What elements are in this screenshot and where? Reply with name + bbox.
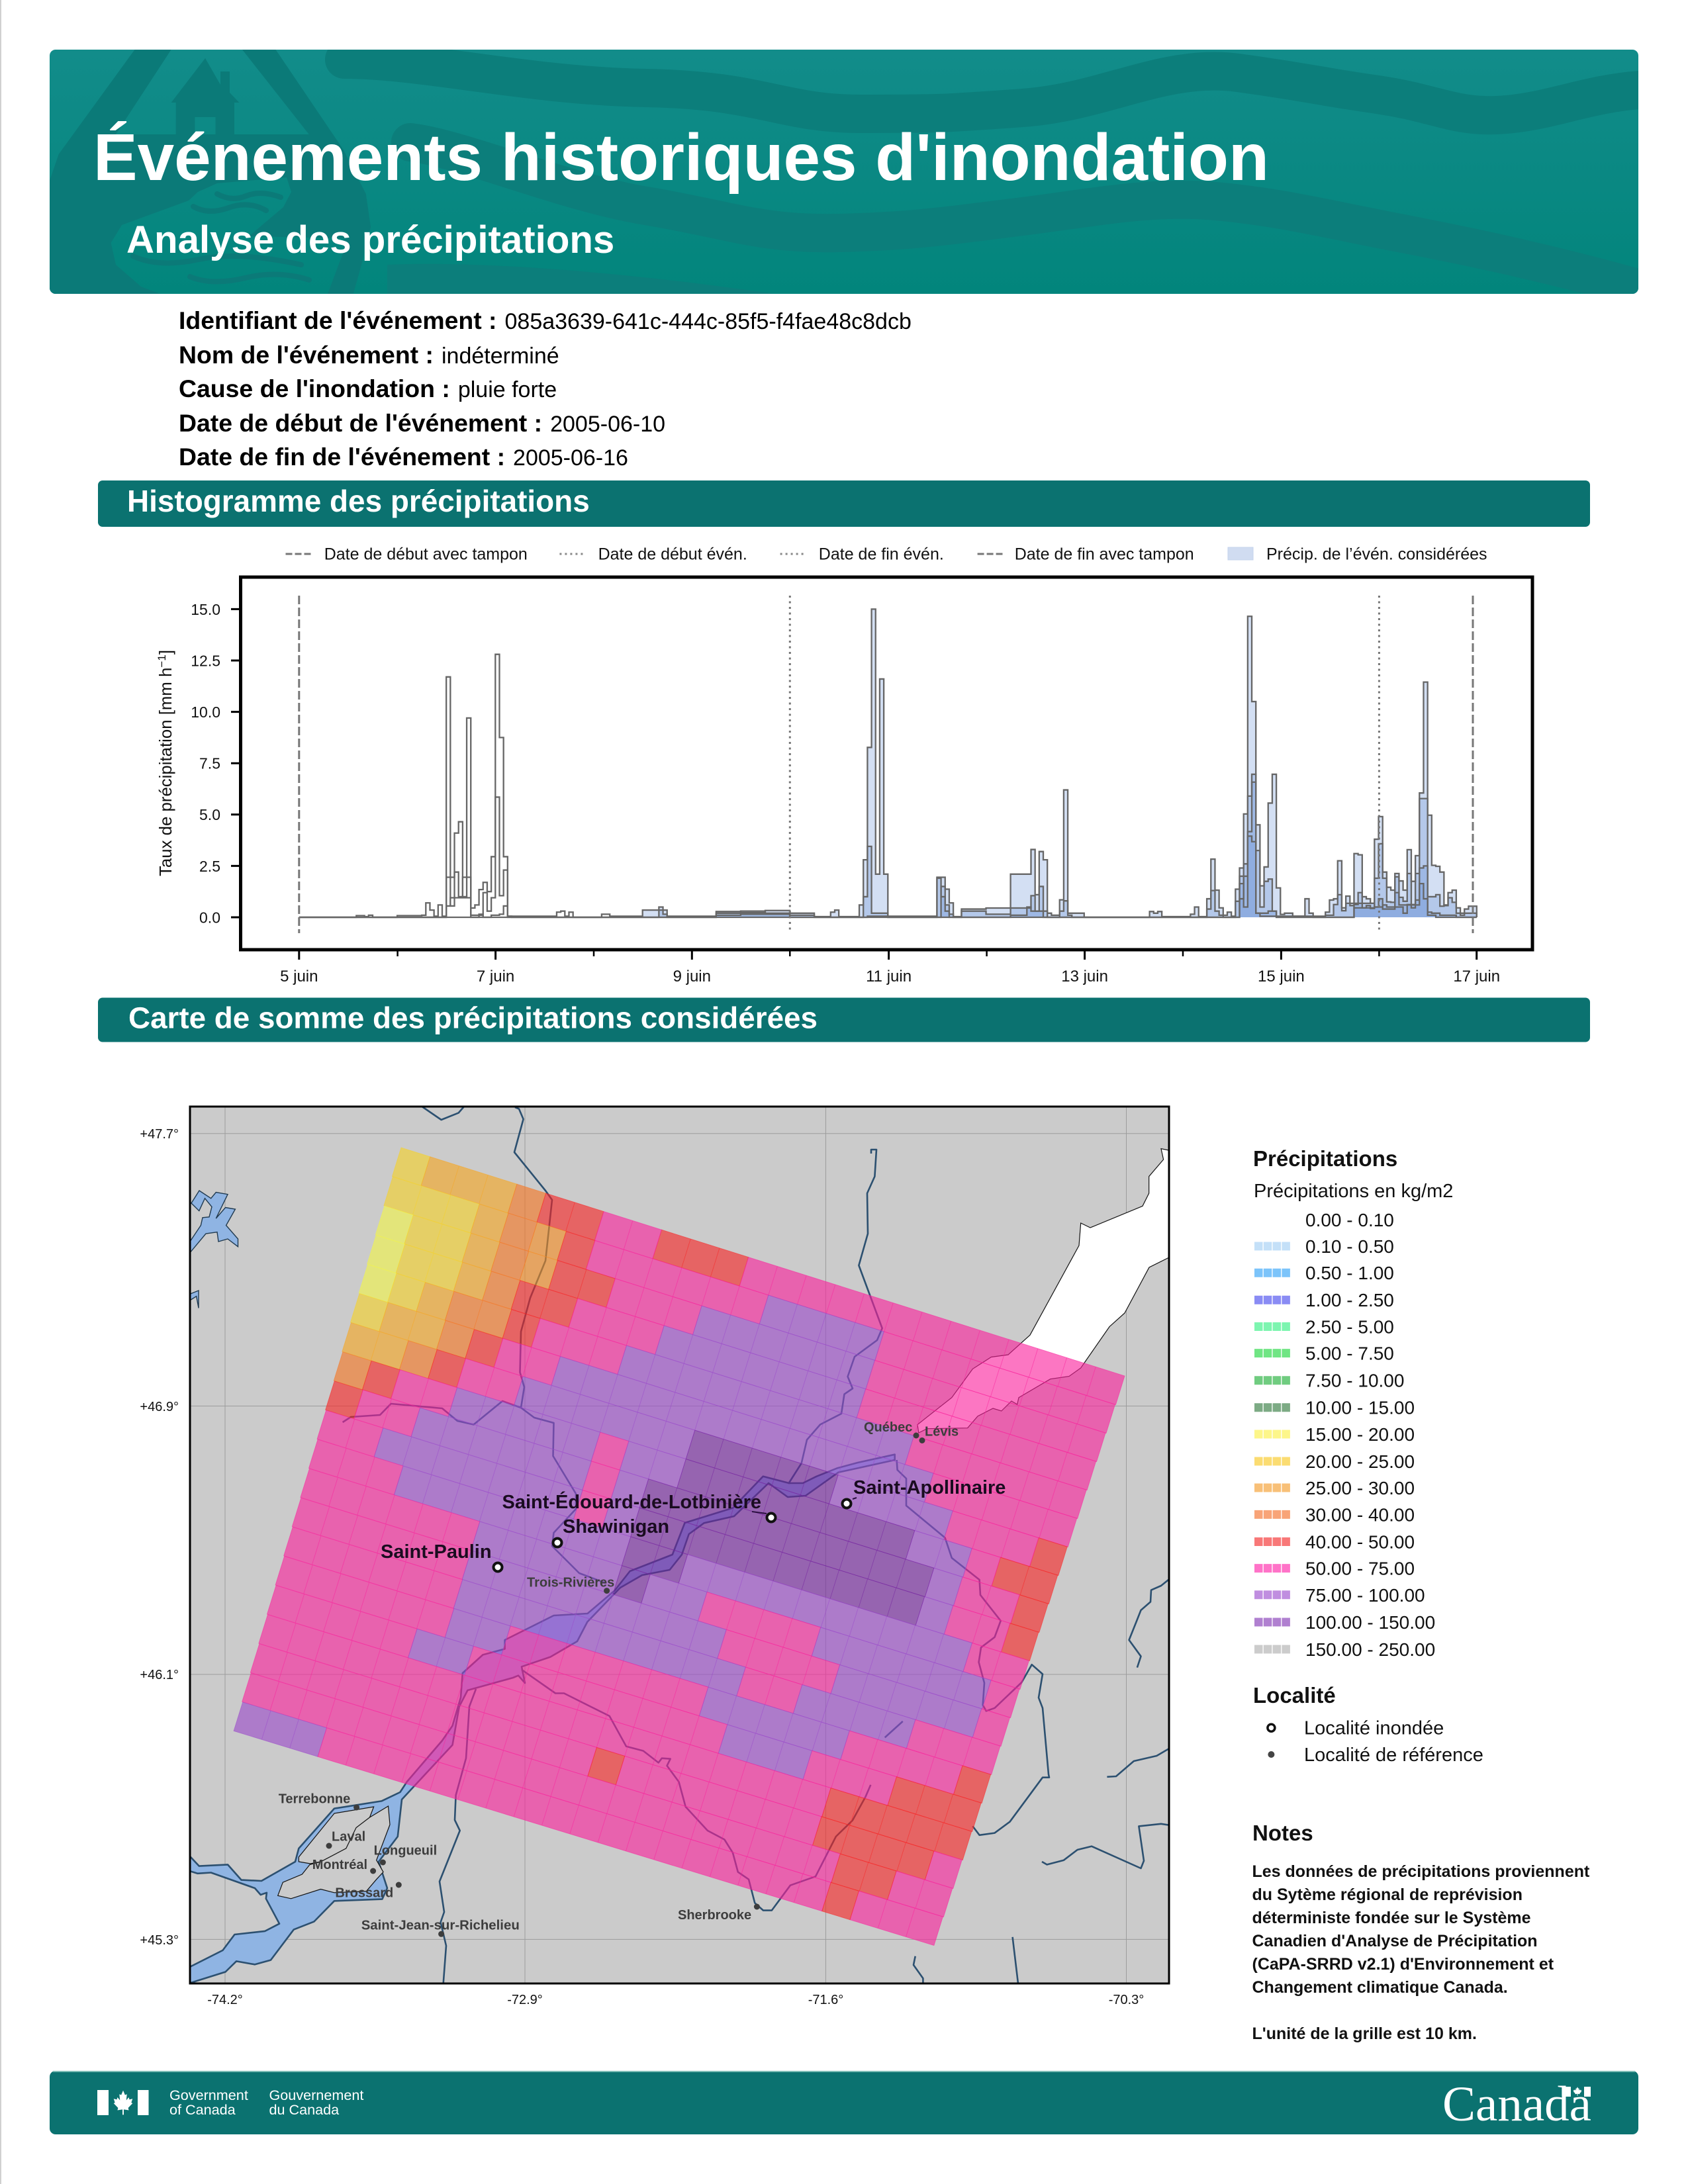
- y axis ticks and labels: 15.0: [191, 601, 220, 618]
- reference localities: Longueuil: [374, 1844, 437, 1858]
- chart legend: Précip. de l’évén. considérées: [1266, 545, 1487, 564]
- notes: Changement climatique Canada.: [1252, 1978, 1508, 1997]
- latitude labels: +46.9°: [140, 1400, 179, 1414]
- legend: precipitation classes: 20.00 - 25.00: [1305, 1451, 1415, 1472]
- legend: precipitation classes: 75.00 - 100.00: [1305, 1585, 1425, 1606]
- notes: Canadien d'Analyse de Précipitation: [1252, 1932, 1538, 1950]
- legend: precipitation classes: [1253, 1146, 1453, 1660]
- x axis ticks and labels: 17 juin: [1453, 968, 1500, 985]
- event information block: Identifiant de l'événement : 085a3639-641c-444c-85f5-f4fae48c8dcb: [179, 306, 912, 334]
- y axis ticks and labels: 0.0: [199, 909, 220, 927]
- legend: precipitation classes: 0.00 - 0.10: [1305, 1210, 1394, 1230]
- reference localities: Terrebonne: [279, 1792, 350, 1807]
- chart legend: Date de fin évén.: [819, 545, 944, 564]
- footer bar: [50, 2071, 1638, 2134]
- longitude labels: -72.9°: [507, 1993, 543, 2007]
- lakes northwest: [189, 1191, 238, 1308]
- legend: precipitation classes: 30.00 - 40.00: [1305, 1505, 1415, 1525]
- y axis ticks and labels: 5.0: [199, 806, 220, 823]
- latitude labels: [140, 1127, 179, 1948]
- legend: locality symbols: Localité de référence: [1304, 1745, 1483, 1766]
- subtitle: Analyse des précipitations: [126, 218, 614, 261]
- notes: déterministe fondée sur le Système: [1252, 1909, 1531, 1927]
- notes: Notes: [1252, 1821, 1313, 1845]
- chart legend: Date de fin avec tampon: [1015, 545, 1194, 564]
- government wordmark: du Canada: [269, 2101, 340, 2118]
- section heading: precipitation map: Carte de somme des précipitations considérées: [128, 1001, 818, 1035]
- reference localities: Québec: [864, 1420, 912, 1435]
- title: Événements historiques d'inondation: [93, 121, 1269, 195]
- rivers: [343, 1107, 1170, 1983]
- reference localities: Saint-Jean-sur-Richelieu: [361, 1919, 520, 1933]
- legend: precipitation classes: Précipitations en kg/m2: [1254, 1181, 1453, 1202]
- header banner: [50, 50, 1648, 294]
- notes: (CaPA-SRRD v2.1) d'Environnement et: [1252, 1955, 1554, 1974]
- legend: locality symbols: Localité inondée: [1304, 1718, 1444, 1739]
- legend: precipitation classes: 50.00 - 75.00: [1305, 1558, 1415, 1579]
- event information block: Date de début de l'événement : 2005-06-10: [179, 409, 665, 437]
- x axis ticks and labels: 15 juin: [1258, 968, 1305, 985]
- section heading: precipitation map: [98, 998, 1590, 1042]
- latitude labels: +47.7°: [140, 1127, 179, 1142]
- reference localities: [279, 1420, 959, 1937]
- legend: precipitation classes: 5.00 - 7.50: [1305, 1343, 1394, 1363]
- x axis ticks and labels: 9 juin: [673, 968, 711, 985]
- legend: precipitation classes: 7.50 - 10.00: [1305, 1370, 1404, 1391]
- histogram bars: step outlines: [299, 609, 1477, 917]
- x axis ticks and labels: [280, 951, 1500, 985]
- government wordmark: Government: [169, 2087, 248, 2103]
- chart legend: [286, 545, 1487, 564]
- y axis ticks and labels: 7.5: [199, 754, 220, 772]
- legend: precipitation classes: 100.00 - 150.00: [1305, 1612, 1435, 1633]
- y axis ticks and labels: 10.0: [191, 704, 220, 721]
- legend: precipitation classes: 0.50 - 1.00: [1305, 1263, 1394, 1283]
- legend: precipitation classes: 40.00 - 50.00: [1305, 1531, 1415, 1553]
- flooded localities: Shawinigan: [563, 1516, 669, 1537]
- y axis title: −1: [156, 655, 168, 668]
- graticule: [190, 1107, 1169, 1983]
- flooded localities: Saint-Apollinaire: [853, 1477, 1006, 1498]
- longitude labels: [207, 1993, 1144, 2007]
- notes: Les données de précipitations proviennent: [1252, 1862, 1590, 1881]
- legend: precipitation classes: 150.00 - 250.00: [1305, 1639, 1435, 1660]
- legend: precipitation classes: 25.00 - 30.00: [1305, 1478, 1415, 1498]
- estuary: [917, 1149, 1172, 1433]
- x axis ticks and labels: 13 juin: [1061, 968, 1108, 985]
- header watermark: flood sign and waves: [50, 50, 1648, 294]
- histogram bars: event-window fill: [643, 610, 1476, 917]
- plot frame: [241, 577, 1532, 950]
- legend: locality symbols: [1253, 1683, 1483, 1766]
- Montréal and Laval islands: [278, 1806, 390, 1899]
- longitude labels: -71.6°: [808, 1993, 843, 2007]
- x axis ticks and labels: 11 juin: [866, 968, 912, 985]
- histogram chart: [156, 577, 1532, 985]
- notes: du Sytème régional de reprévision: [1252, 1886, 1523, 1904]
- y axis ticks and labels: [191, 601, 240, 927]
- map body clipped to frame: [185, 1107, 1172, 1987]
- reference localities: Sherbrooke: [678, 1908, 751, 1923]
- icon: Government of Canada flag: [97, 2090, 148, 2115]
- event information block: [179, 306, 912, 471]
- reference localities: Lévis: [925, 1424, 959, 1439]
- y axis ticks and labels: 2.5: [199, 858, 220, 875]
- y axis ticks and labels: 12.5: [191, 653, 220, 670]
- longitude labels: -70.3°: [1109, 1993, 1144, 2007]
- chart legend: Date de début avec tampon: [324, 545, 528, 564]
- legend: precipitation classes: 0.10 - 0.50: [1305, 1236, 1394, 1257]
- St. Lawrence river: [185, 1455, 895, 1987]
- x axis ticks and labels: 5 juin: [280, 968, 318, 985]
- latitude labels: +46.1°: [140, 1668, 179, 1682]
- flooded localities: [381, 1477, 1006, 1571]
- legend: precipitation classes: 15.00 - 20.00: [1305, 1424, 1415, 1445]
- x axis ticks and labels: 7 juin: [477, 968, 514, 985]
- section heading: histogram: Histogramme des précipitations: [127, 484, 590, 518]
- legend: precipitation classes: 10.00 - 15.00: [1305, 1398, 1415, 1418]
- precipitation grid: [234, 1148, 1125, 1946]
- map panel: [140, 1107, 1172, 2007]
- reference localities: Laval: [332, 1830, 365, 1844]
- event information block: Nom de l'événement : indéterminé: [179, 341, 559, 369]
- map frame: [190, 1107, 1169, 1983]
- government wordmark: [169, 2087, 363, 2118]
- event information block: Cause de l'inondation : pluie forte: [179, 375, 557, 402]
- Canada wordmark: Canada: [1442, 2077, 1591, 2132]
- government wordmark: of Canada: [169, 2101, 236, 2118]
- legend: locality symbols: Localité: [1253, 1683, 1336, 1707]
- y axis title: ]: [157, 650, 175, 655]
- longitude labels: -74.2°: [207, 1993, 243, 2007]
- y axis title: Taux de précipitation [mm h: [157, 668, 175, 876]
- event date reference lines: [299, 596, 1473, 933]
- event information block: Date de fin de l'événement : 2005-06-16: [179, 443, 628, 471]
- notes: [1252, 1821, 1590, 2043]
- flooded localities: Saint-Édouard-de-Lotbinière: [502, 1490, 761, 1513]
- government wordmark: Gouvernement: [269, 2087, 363, 2103]
- latitude labels: +45.3°: [140, 1933, 179, 1948]
- notes: L'unité de la grille est 10 km.: [1252, 2025, 1477, 2043]
- legend: precipitation classes: Précipitations: [1253, 1146, 1397, 1171]
- reference localities: Trois-Rivières: [527, 1575, 614, 1590]
- legend: precipitation classes: 1.00 - 2.50: [1305, 1290, 1394, 1310]
- chart legend: Date de début évén.: [598, 545, 747, 564]
- section heading: histogram: [98, 480, 1590, 527]
- reference localities: Brossard: [335, 1886, 393, 1901]
- flooded localities: Saint-Paulin: [381, 1541, 492, 1563]
- legend: precipitation classes: 2.50 - 5.00: [1305, 1317, 1394, 1337]
- reference localities: Montréal: [312, 1858, 367, 1872]
